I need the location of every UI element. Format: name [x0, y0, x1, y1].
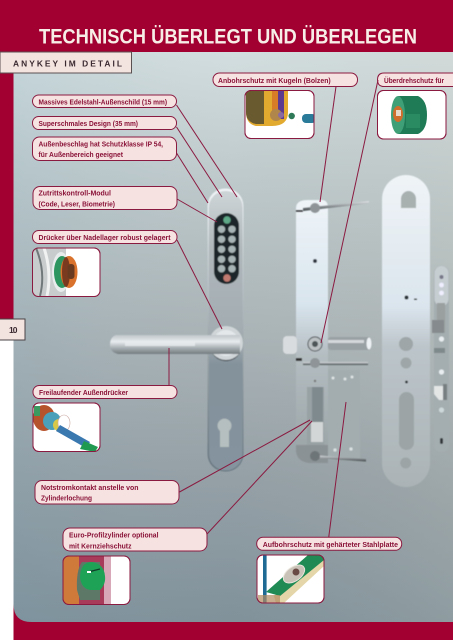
- thumbnail: Aufbohrschutz: [257, 555, 324, 603]
- top cut-out: [401, 191, 416, 208]
- label: Euro-Profilzylinder: Euro-Profilzylinder optional: [69, 530, 158, 539]
- bolt: top: [303, 201, 369, 213]
- label: Außenbeschlag: [32, 137, 176, 160]
- label: Euro-Profilzylinder: [63, 528, 207, 551]
- label: Außenbeschlag: für Außenbereich geeignet: [38, 150, 124, 159]
- label: Anbohrschutz: Anbohrschutz mit Kugeln (Bolzen): [218, 76, 331, 85]
- bolt: bottom: [310, 451, 366, 462]
- cylinder keyhole: [218, 419, 232, 447]
- label: Superschmales Design: [32, 116, 176, 130]
- white left margin: [0, 320, 14, 640]
- thumbnail: Euro-Profilzylinder: [63, 556, 130, 605]
- label: Freilaufender Außendrücker: Freilaufender Außendrücker: [39, 388, 128, 397]
- label: Überdrehschutz: [378, 73, 453, 86]
- inner handle: [283, 336, 372, 354]
- label: Überdrehschutz: Überdrehschutz für: [384, 76, 444, 85]
- thumbnail: Überdrehschutz: [378, 90, 446, 139]
- page number tab: 10: [9, 325, 18, 335]
- leader lines: [169, 80, 378, 538]
- outer escutcheon plate: [208, 188, 244, 472]
- thumbnail: Freilaufender Drücker: [33, 403, 100, 452]
- handle hole: [399, 337, 413, 351]
- strike plate with cut-outs: [382, 175, 430, 487]
- label: Drücker: [32, 230, 177, 244]
- inner mounting plate: [296, 200, 360, 463]
- keypad: [214, 213, 239, 284]
- lock case: [432, 266, 449, 452]
- cylinder slot: [399, 392, 414, 450]
- label: Notstromkontakt: Notstromkontakt anstelle von: [41, 483, 138, 492]
- section tab: [0, 52, 132, 73]
- screw holes: [404, 296, 417, 383]
- small round hole: [400, 358, 412, 368]
- label: Massives Edelstahl-Außenschild: Massives Edelstahl-Außenschild (15 mm): [38, 97, 168, 106]
- thumbnail: Anbohrschutz: [245, 90, 316, 138]
- bolt: middle: [303, 358, 368, 368]
- bottom hole: [400, 458, 411, 468]
- section tab: ANYKEY IM DETAIL: [13, 58, 122, 68]
- label: Zutrittskontroll-Modul: (Code, Leser, Biometrie): [38, 200, 116, 208]
- thumbnail: Nadellager: [32, 248, 100, 296]
- label: Superschmales Design: Superschmales Design (35 mm): [38, 119, 139, 128]
- page number tab: [0, 319, 25, 340]
- label: Zutrittskontroll-Modul: Zutrittskontroll-Modul: [38, 189, 111, 198]
- label: Anbohrschutz: [213, 73, 358, 86]
- label: Zutrittskontroll-Modul: [33, 186, 177, 210]
- label: Notstromkontakt: [35, 480, 179, 504]
- label: Aufbohrschutz: [257, 537, 402, 550]
- label: Drücker: Drücker über Nadellager robust gelagert: [38, 233, 171, 242]
- outer handle and rose: [110, 326, 243, 361]
- label: Außenbeschlag: Außenbeschlag hat Schutzklasse IP 54,: [38, 139, 163, 148]
- label: Notstromkontakt: Zylinderlochung: [41, 494, 92, 503]
- label: Euro-Profilzylinder: mit Kernziehschutz: [69, 541, 132, 550]
- label: Freilaufender Außendrücker: [33, 386, 177, 398]
- label: Aufbohrschutz: Aufbohrschutz mit gehärteter Stahlplatte: [263, 540, 398, 549]
- label: Massives Edelstahl-Außenschild: [32, 95, 176, 108]
